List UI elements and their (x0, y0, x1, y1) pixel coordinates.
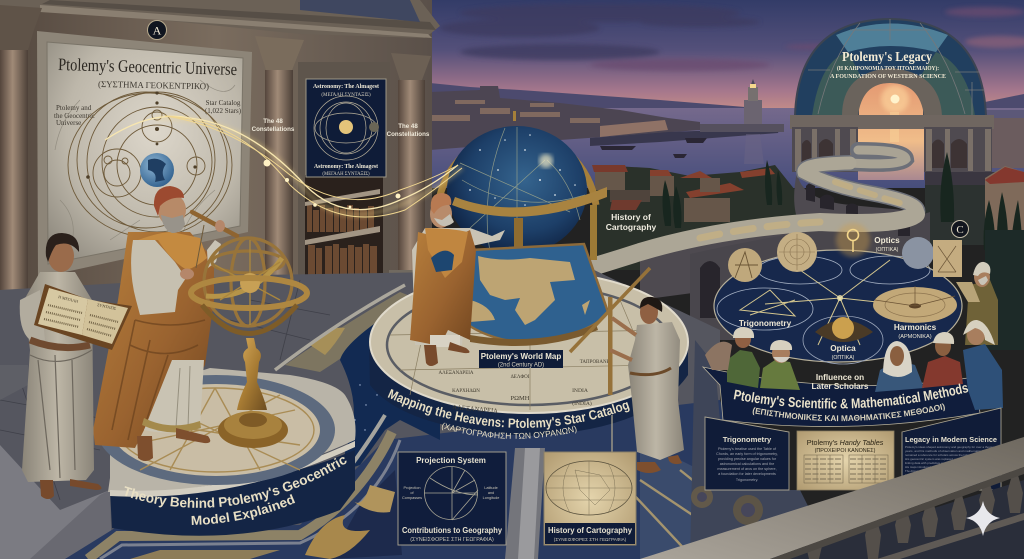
stone steps, lower left (0, 365, 112, 559)
text: legacy heading (830, 49, 946, 80)
labels on the methods disc: Optica (830, 344, 856, 353)
map labels on the platform: ΑΛΕΞΑΝΔΡΕΙΑ (452, 404, 498, 415)
labels on the methods disc: (ΟΠΤΙΚΑ) (832, 355, 855, 361)
icon: open book: ΣΥΝΤΑΞΙΣ (97, 302, 117, 311)
mosaic floor (65, 400, 780, 559)
circle marker A (148, 20, 166, 40)
label: star catalog: (1,022 Stars) (205, 107, 242, 115)
map labels on the platform (438, 360, 611, 415)
panel: legacy in modern science (902, 408, 1001, 490)
sun (881, 85, 909, 142)
chart: geocentric orbits (68, 91, 232, 237)
boats (600, 138, 707, 158)
map labels on the platform: ΑΛΕΞΑΝΔΡΕΙΑ (438, 371, 474, 376)
icon: parchment medallions (728, 232, 962, 282)
starry river between platforms (340, 300, 440, 470)
stone floor (0, 268, 720, 559)
card: Projection System: of (410, 491, 415, 495)
label: influence on later scholars (812, 373, 869, 391)
map labels on the platform: ΔΕΛΦΟΙ (511, 375, 530, 380)
panel: legacy in modern science: His legacy continues. (937, 481, 965, 485)
icon: earth at centre (140, 153, 174, 187)
label: Ptolemy's World Map (479, 350, 563, 368)
label: Ptolemy and the geocentric universe (54, 104, 95, 127)
card: History of Cartography (544, 415, 636, 545)
panel: legacy in modern science: inspiring Copernicus and Kepler, whose work began from his precise tables. (905, 473, 997, 477)
labels on the methods disc: Harmonics (894, 323, 937, 332)
map labels on the platform: INDIA (572, 388, 588, 394)
bookshelf (298, 62, 390, 287)
lower town with red roofs (592, 165, 800, 270)
map labels on the platform: (INDIA) (572, 400, 592, 407)
panel: trigonometry text: providing precise angular values for (718, 457, 777, 461)
card: History of Cartography: (ΣΥΝΕΙΣΦΟΡΕΣ ΣΤΗ ΓΕΩΓΡΑΦΙΑ) (554, 537, 627, 542)
labels on the methods disc: (ΑΡΜΟΝΙΚΑ) (898, 334, 932, 340)
card: Projection System: Longitude (483, 496, 499, 500)
banner text: mapping: (ΧΑΡΤΟΓΡΑΦΗΣΗ ΤΩΝ ΟΥΡΑΝΩΝ) (442, 422, 577, 439)
icon: armillary sphere (191, 238, 307, 448)
icon: white four-point sparkle (966, 501, 1000, 536)
mosaic floor, right side (690, 340, 820, 559)
figure: Ptolemy pointing at the globe (410, 193, 505, 366)
winding road wall arcade (640, 172, 930, 340)
label: Ptolemy and the geocentric universe: Ptolemy and (56, 104, 92, 112)
panel: trigonometry text: astronomical calculations and the (720, 462, 774, 466)
panel: legacy in modern science: His geocentric system was replaced, yet his approach endures today, (905, 457, 997, 461)
figure: student holding a book (20, 233, 132, 499)
panel: legacy in modern science: years, and his methods of observation and mathematical modelling (905, 449, 997, 453)
panel: legacy in modern science: Modern science owes him a tradition of careful measurement. (910, 477, 992, 481)
labels on the methods disc: (ΟΠΤΙΚΑ) (876, 247, 899, 253)
banner greek subtitle: (ΕΠΙΣΤΗΜΟΝΙΚΕΣ ΚΑΙ ΜΑΘΗΜΑΤΙΚΕΣ ΜΕΘΟΔΟΙ) (752, 403, 945, 422)
label: Ptolemy's World Map: Ptolemy's World Map (481, 352, 561, 361)
card: Projection System (398, 452, 506, 545)
balustrade, lower right (640, 437, 1024, 559)
mosaic circle with star pattern (97, 375, 335, 485)
panel: legacy in modern science: Legacy in Modern Science (905, 435, 997, 444)
far town behind the arch, right (924, 110, 1024, 168)
map labels on the platform: ΚΑΡΧΗΔΩΝ (452, 389, 480, 394)
text: legacy heading: Ptolemy's Legacy (842, 49, 932, 64)
lighthouse (700, 79, 784, 164)
card: Projection System: (ΣΥΝΕΙΣΦΟΡΕΣ ΣΤΗ ΓΕΩΓΡΑΦΙΑ) (410, 537, 494, 543)
title: Ptolemy's Geocentric Universe (58, 54, 238, 79)
panel: trigonometry text: Trigonometry (723, 435, 772, 444)
panel: Astronomy, the Almagest: (ΜΕΓΑΛΗ ΣΥΝΤΑΞΙΣ) (321, 93, 371, 98)
world map sheet (462, 244, 608, 346)
label: the 48 constellations, left (252, 118, 295, 133)
icon: open book: Η ΜΕΓΑΛΗ (58, 294, 79, 304)
panel: legacy in modern science: The Almagest transmitted Greek astronomy to later generations of readers, (905, 469, 997, 473)
figure: scholar with scroll, upper right (956, 262, 998, 345)
panel: Ptolemy's Legacy dome (790, 19, 994, 172)
panel: Ptolemy's Handy Tables: Ptolemy's Handy Tables (807, 438, 884, 447)
icon: open book (30, 284, 132, 350)
icon: telescope (192, 212, 237, 236)
panel: Ptolemy's Handy Tables: (ΠΡΟΧΕΙΡΟΙ ΚΑΝΟΝΕΣ) (815, 448, 876, 454)
entablature (0, 0, 440, 38)
scholars, right group (875, 320, 1003, 410)
celestial globe (438, 111, 607, 260)
label: Ptolemy's World Map: (2nd Century AD) (498, 362, 544, 368)
card: History of Cartography: History of Cartography (548, 526, 633, 535)
distant mountains (430, 83, 1024, 112)
label: the 48 constellations, right: The 48 (398, 123, 418, 130)
figure: assistant with surveying staff (570, 268, 684, 473)
card: Projection System: Projection (404, 486, 420, 490)
mosaic band behind left platform (275, 285, 420, 372)
winding road surface (470, 150, 917, 300)
panel: legacy in modern science: remained a reference for scholars across the Islamic world and Europe. (905, 453, 997, 457)
card: Projection System: Latitude (484, 486, 498, 490)
icon: star sparkles on ribbon (264, 160, 400, 208)
label: History of Cartography: History of (611, 212, 651, 222)
label: History of Cartography (606, 212, 657, 232)
map labels on the platform: ΡΩΜΗ (511, 395, 530, 402)
circle marker C (952, 220, 968, 238)
icon: eye (815, 317, 873, 342)
banner text: theory: Model Explained (192, 494, 296, 525)
greek subtitle: (ΣΥΣΤΗΜΑ ΓΕΟΚΕΝΤΡΙΚΟ) (98, 79, 209, 91)
label: History of Cartography: Cartography (606, 222, 657, 232)
panel: legacy in modern science: Ptolemy's ideas shaped astronomy and geography for over a thousand (905, 445, 997, 449)
labels on the methods disc: Trigonometry (739, 319, 792, 328)
label: the 48 constellations, right: Constellations (387, 131, 430, 138)
icon: lightbulb for optics (836, 223, 870, 257)
label: the 48 constellations, right (387, 123, 430, 138)
panel: trigonometry text: a foundation for later developments (718, 472, 776, 476)
background: dusk sky (420, 0, 1024, 125)
card: Projection System: Compasses (402, 496, 422, 500)
card: Projection System: Contributions to Geography (402, 526, 502, 535)
panel: trigonometry text (705, 417, 789, 490)
card: Projection System: and (488, 491, 494, 495)
platform: Theory section (102, 368, 356, 536)
banner: scientific and mathematical methods (702, 320, 1003, 427)
figure: Ptolemy with telescope (93, 186, 237, 461)
panel: Astronomy, the Almagest (306, 79, 386, 177)
city on the far shore (430, 86, 780, 150)
text: legacy heading: (Η ΚΛΗΡΟΝΟΜΙΑ ΤΟΥ ΠΤΟΛΕΜΑΙΟΥ): (837, 65, 939, 72)
labels on the methods disc (739, 236, 937, 361)
map labels on the platform: ΤΑΠΡΟΒΑΝΗ (580, 360, 611, 365)
clouds (440, 4, 1024, 71)
stone columns (0, 5, 433, 370)
scholars, left group (705, 327, 800, 390)
label: the 48 constellations, left: Constellations (252, 126, 295, 133)
panel: Ptolemy's Handy Tables (797, 431, 894, 490)
label: star catalog: Star Catalog (206, 99, 241, 107)
banner text: mapping: Mapping the Heavens: Ptolemy's Star Catalog (388, 389, 630, 430)
label: influence on later scholars: Later Scholars (812, 382, 869, 391)
circle marker A: A (153, 24, 162, 38)
panel: trigonometry text: measurement of arcs on the sphere, (717, 467, 777, 471)
glowing orbital ribbon (105, 116, 462, 217)
panel: trigonometry text: Ptolemy's treatise used the Table of (718, 447, 777, 451)
harbour sea (420, 108, 1024, 188)
cypress trees (662, 152, 1024, 350)
buildings right of the arch (925, 166, 1024, 245)
label: the 48 constellations, left: The 48 (263, 118, 283, 125)
banner text: theory: Theory Behind Ptolemy's Geocentric (124, 457, 346, 508)
panel: legacy in modern science: linking data with predictive models that remain at the core of science. (905, 461, 997, 465)
banner heading: Ptolemy's Scientific & Mathematical Methods (734, 384, 968, 409)
panel: Astronomy, the Almagest: Astronomy: The Almagest (313, 83, 380, 90)
card: Projection System: Projection System (416, 456, 486, 465)
panel: trigonometry text: Chords, an early form of trigonometry, (716, 452, 778, 456)
label: Ptolemy and the geocentric universe: Universe (56, 119, 81, 127)
platform: Mapping section (369, 276, 689, 439)
icon: harmonics disc (873, 286, 957, 323)
panel: navy methods disc (714, 223, 962, 364)
sunset through the arch (858, 83, 924, 180)
panel: trigonometry text: Trigonometry. (736, 478, 758, 482)
label: star catalog (205, 99, 242, 115)
text: legacy heading: A FOUNDATION OF WESTERN SCIENCE (830, 73, 946, 80)
panel: legacy in modern science: His maps introduced coordinates of latitude and longitude in common use. (905, 465, 997, 469)
labels on the methods disc: Optics (874, 236, 900, 245)
panel: Astronomy, the Almagest: (ΜΕΓΑΛΗ ΣΥΝΤΑΞΙΣ) (322, 172, 370, 177)
label: influence on later scholars: Influence on (816, 373, 864, 382)
back wall (0, 0, 432, 300)
label: Ptolemy and the geocentric universe: the Geocentric (54, 112, 95, 120)
panel: Astronomy, the Almagest: Astronomy: The Almagest (314, 163, 379, 170)
circle marker C: C (956, 224, 964, 236)
panel: wall plaque, geocentric universe (37, 31, 252, 278)
